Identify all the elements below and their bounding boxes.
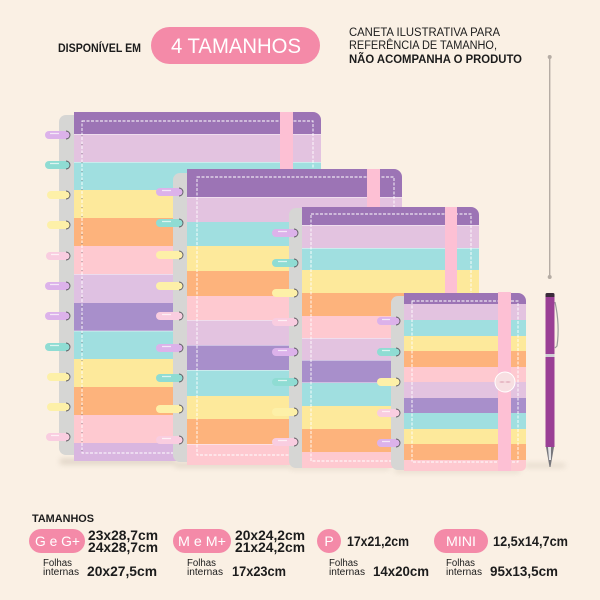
size block: G e G+: Folhas: [43, 558, 72, 569]
cover bands P: [302, 207, 479, 468]
header: pen reference note: CANETA ILUSTRATIVA PARA: [349, 27, 500, 39]
size block: P: internas: [329, 567, 365, 578]
stitching M: [197, 177, 394, 455]
size block: G e G+: G e G+: [35, 533, 80, 549]
size block: M e M+: 21x24,2cm: [235, 539, 305, 555]
header: pink pill with 4 tamanhos: [151, 27, 320, 64]
size block: G e G+: internas: [43, 567, 79, 578]
rings P: [272, 229, 298, 446]
rings M: [156, 188, 183, 444]
elastic M: [367, 169, 380, 209]
header: pen reference note: NÃO ACOMPANHA O PRODUTO: [349, 53, 522, 66]
cover bands G: [74, 112, 321, 461]
rings MINI: [377, 317, 400, 447]
spine MINI: [391, 296, 413, 470]
header: available label: DISPONÍVEL EM: [58, 42, 141, 55]
header: pen reference note: REFERÊNCIA DE TAMANHO,: [349, 39, 497, 52]
pen height reference line: [548, 55, 552, 279]
elastic MINI: [498, 292, 511, 471]
size block: P: 17x21,2cm: [347, 533, 409, 549]
size block: MINI: 12,5x14,7cm: [493, 533, 568, 549]
elastic P: [445, 207, 457, 295]
stitching MINI: [412, 301, 518, 462]
size block: MINI: [434, 529, 568, 579]
size block: M e M+: M e M+: [178, 533, 226, 549]
size block: MINI: 95x13,5cm: [490, 563, 558, 579]
size block: G e G+: 24x28,7cm: [88, 539, 158, 555]
spine M: [173, 173, 195, 462]
illustrative pen: [546, 293, 558, 467]
stitching P: [311, 214, 471, 461]
header: pink pill with 4 tamanhos: 4 TAMANHOS: [171, 35, 301, 58]
cover bands M: [187, 169, 402, 465]
rings G: [45, 131, 70, 441]
snap button MINI: [495, 372, 515, 392]
size block: M e M+: 20x24,2cm: [235, 527, 305, 543]
size block: MINI: Folhas: [446, 558, 475, 569]
elastic G: [280, 112, 293, 172]
header: pen reference note: [349, 27, 522, 66]
size block: P: Folhas: [329, 558, 358, 569]
spine G: [59, 115, 81, 455]
notebook: size G: [45, 112, 321, 461]
size block: MINI: internas: [446, 567, 482, 578]
size block: M e M+: [173, 527, 305, 579]
size block: P: [317, 529, 429, 579]
size block: M e M+: Folhas: [187, 558, 216, 569]
notebook: size M: [156, 169, 402, 465]
sizes heading: TAMANHOS: [32, 513, 94, 525]
ground shadow under notebooks: [60, 459, 565, 472]
stitching G: [82, 121, 313, 453]
size block: G e G+: 20x27,5cm: [87, 563, 157, 579]
size block: MINI: MINI: [446, 533, 476, 549]
size block: G e G+: 23x28,7cm: [88, 527, 158, 543]
size block: P: P: [324, 533, 334, 549]
size block: G e G+: [29, 527, 158, 579]
notebook: size P: [272, 207, 479, 468]
cover bands MINI: [404, 293, 526, 471]
spine P: [289, 208, 311, 468]
size block: P: 14x20cm: [373, 563, 429, 579]
size block: M e M+: internas: [187, 567, 223, 578]
notebook: size MINI: [377, 292, 526, 471]
size block: M e M+: 17x23cm: [232, 563, 286, 579]
